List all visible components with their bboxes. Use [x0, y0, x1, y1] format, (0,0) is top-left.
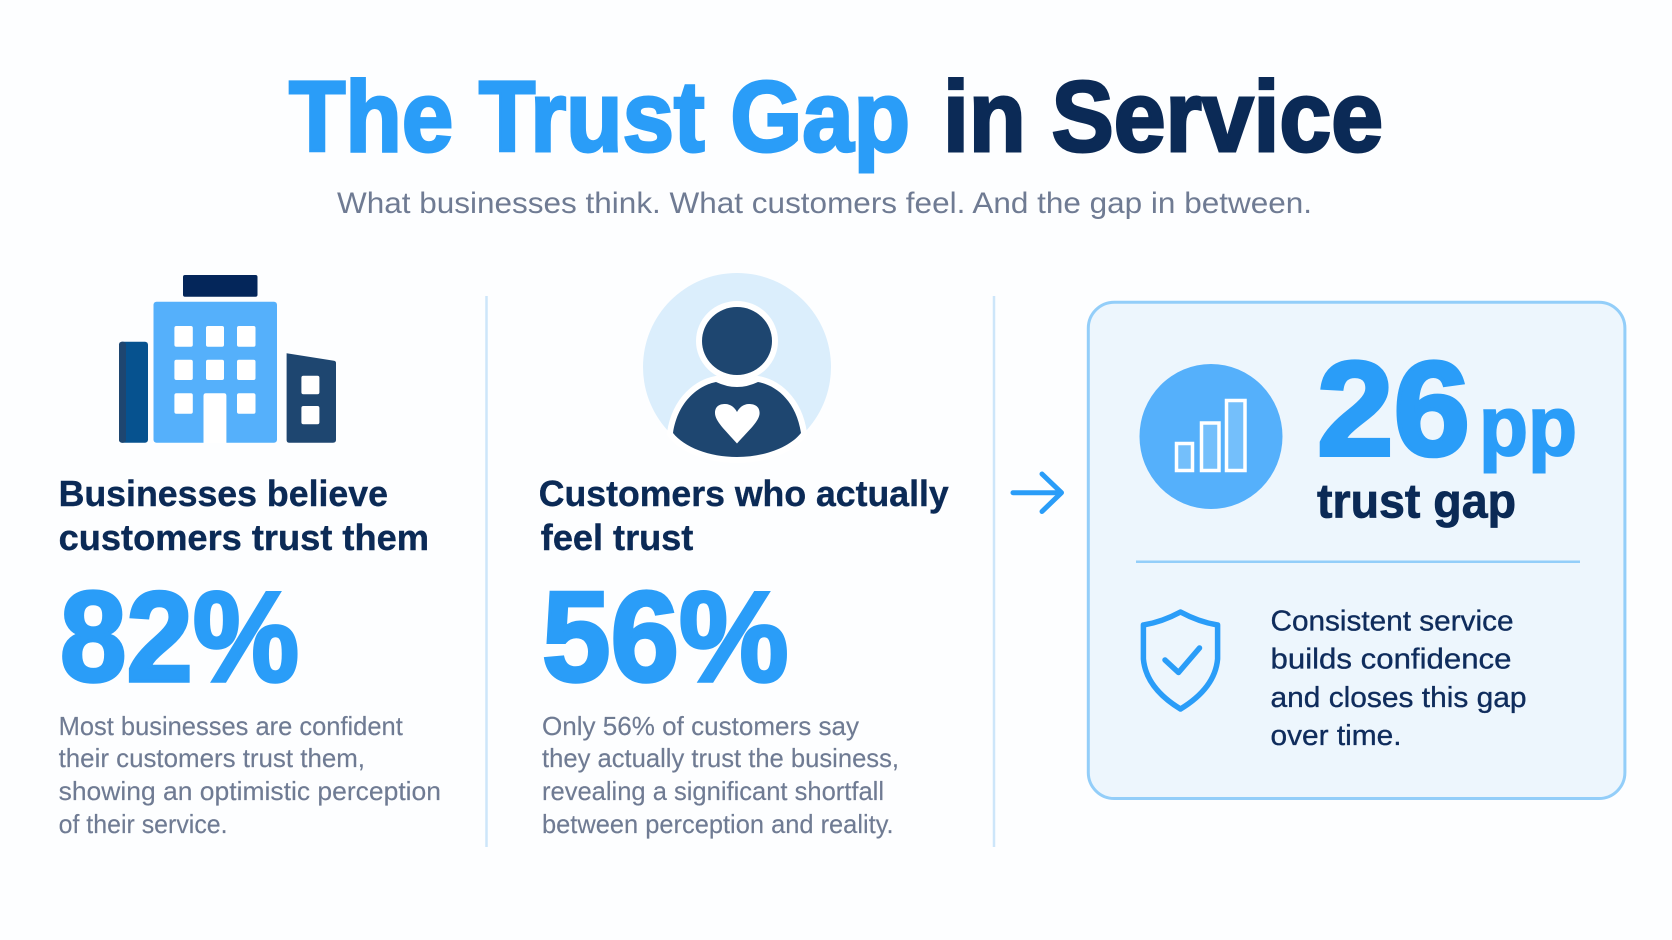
stat: 26pp: 26: [1317, 335, 1470, 484]
description: of their service.: [59, 809, 228, 839]
callout text: and closes this gap: [1270, 682, 1526, 714]
panel: trust gap card: [1088, 302, 1625, 798]
label: trust gap: trust gap: [1317, 476, 1516, 528]
heading: customers trust them: [59, 517, 429, 558]
title: [289, 61, 1383, 173]
column dividers: [486, 296, 994, 847]
icon: shield check: [1143, 612, 1218, 709]
panel: customers: [539, 273, 949, 839]
title: The Trust Gap: [289, 61, 910, 173]
heading: Customers who actually: [539, 473, 949, 514]
icon: bar chart in circle: [1140, 364, 1282, 509]
description: revealing a significant shortfall: [542, 776, 884, 806]
description: between perception and reality.: [542, 809, 894, 839]
stat: 82%: 82%: [60, 566, 299, 709]
description: their customers trust them,: [59, 743, 365, 773]
callout text: builds confidence: [1270, 644, 1512, 676]
description: they actually trust the business,: [542, 743, 899, 773]
stat: 26pp: [1317, 335, 1577, 484]
panel: businesses: [59, 275, 441, 839]
stat: 26pp: pp: [1479, 379, 1577, 473]
heading: [539, 473, 949, 558]
description: Most businesses are confident: [59, 711, 404, 741]
description: [542, 711, 899, 839]
title: in Service: [943, 61, 1383, 173]
divider: [1136, 560, 1580, 563]
icon: person with heart: [643, 273, 831, 461]
arrow: [1013, 474, 1062, 512]
heading: [59, 473, 429, 558]
stat: 56%: 56%: [542, 566, 788, 709]
heading: Businesses believe: [59, 473, 388, 514]
callout text: Consistent service: [1270, 606, 1514, 638]
description: showing an optimistic perception: [59, 776, 441, 806]
callout text: [1270, 606, 1526, 752]
callout text: over time.: [1270, 720, 1402, 752]
subtitle: What businesses think. What customers feel. And the gap in between.: [337, 187, 1312, 220]
heading: feel trust: [541, 517, 693, 558]
description: [59, 711, 441, 839]
icon: office building: [119, 275, 336, 443]
description: Only 56% of customers say: [542, 711, 859, 741]
